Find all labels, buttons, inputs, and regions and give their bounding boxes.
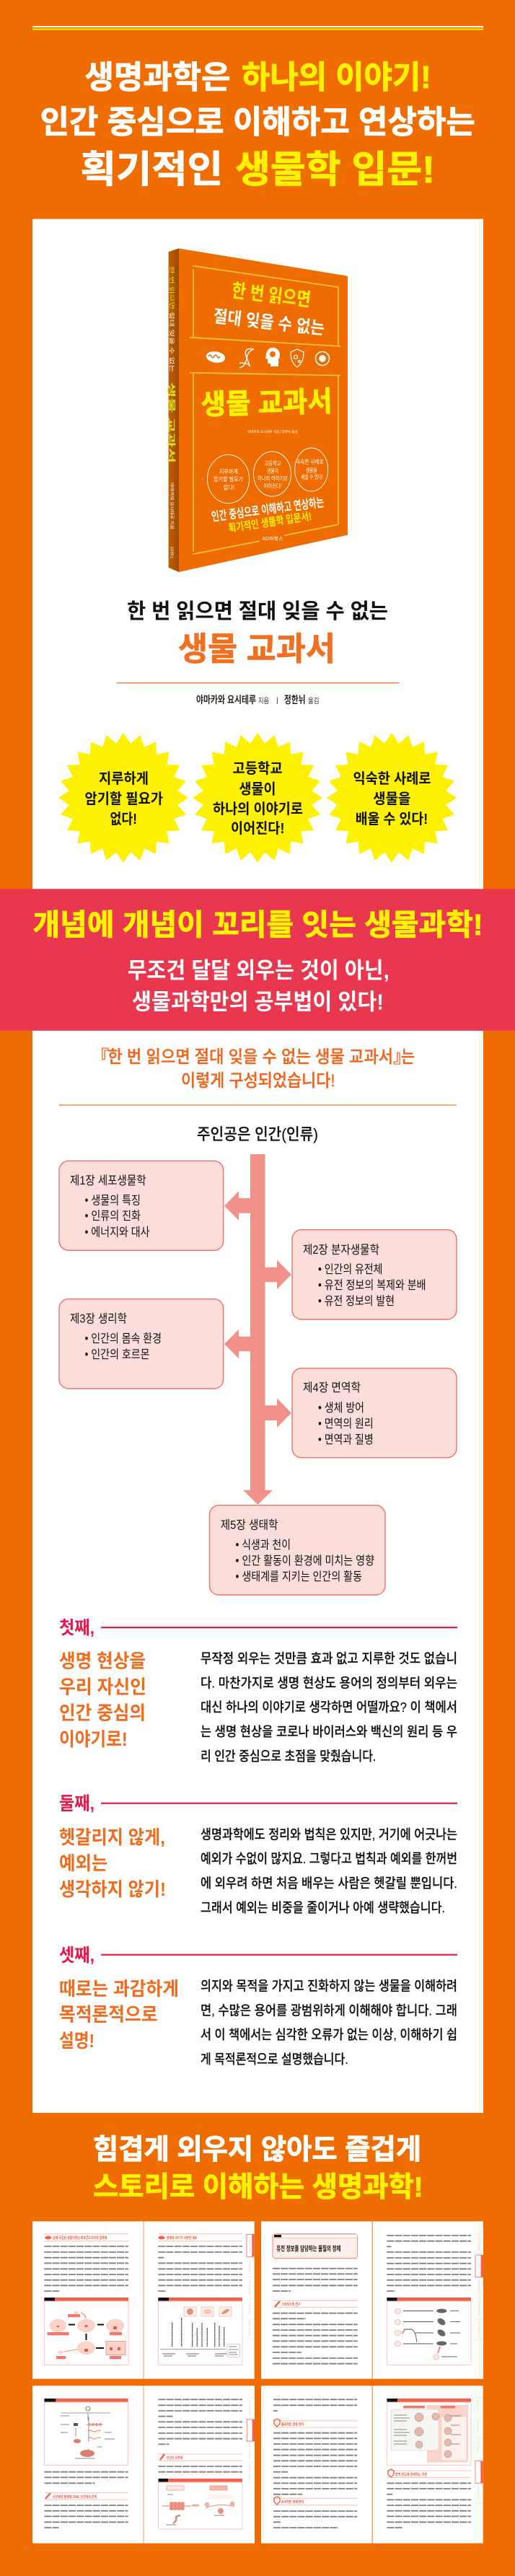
section: second: 둘째, bbox=[59, 1793, 94, 1814]
section: first: 다. 마찬가지로 생명 현상도 용어의 정의부터 외우는 bbox=[201, 1675, 457, 1690]
panel: chapter 5: • 생태계를 지키는 인간의 활동 bbox=[235, 1570, 362, 1583]
section: third: 설명! bbox=[59, 2030, 94, 2052]
red banner bbox=[0, 889, 515, 1031]
section: first: 는 생명 현상을 코로나 바이러스와 백신의 원리 등 우 bbox=[201, 1724, 457, 1739]
starburst 3: 익숙한 사례로 bbox=[353, 770, 431, 787]
panel: chapter 5: 제5장 생태학 bbox=[221, 1518, 278, 1532]
book cover: 야마카와 요시테루 지음 | 정한뉘 옮김 bbox=[247, 429, 298, 434]
arrow: central flow bbox=[243, 1154, 273, 1505]
panel: chapter 1: • 생물의 특징 bbox=[85, 1193, 141, 1208]
section: first: 대신 하나의 이야기로 생각하면 어떨까요? 이 책에서 bbox=[201, 1700, 457, 1715]
sub heading bbox=[273, 2497, 357, 2505]
section: first: 리 인간 중심으로 초점을 맞췄습니다. bbox=[201, 1749, 376, 1764]
section: second bbox=[59, 1793, 457, 1915]
author line: 정한뉘 bbox=[284, 694, 306, 705]
author line bbox=[196, 694, 320, 705]
starburst 1 bbox=[58, 733, 188, 863]
sub heading: 유전체와 염색체, DNA, 유전자의 관계 bbox=[53, 2494, 97, 2500]
starburst 2 bbox=[193, 733, 322, 863]
book cover: 인간 중심으로 이해하고 연상하는 bbox=[211, 496, 325, 524]
starburst 2: 이어진다! bbox=[231, 820, 284, 837]
page heading bbox=[44, 2234, 128, 2241]
starburst 2: 생물이 bbox=[239, 781, 276, 798]
section: third bbox=[59, 1946, 457, 2067]
composition heading: 』 bbox=[393, 1047, 410, 1067]
book cover: 없다! bbox=[224, 485, 234, 491]
book cover: 암기할 필요가 bbox=[214, 475, 244, 483]
chapter tabs bbox=[247, 2234, 255, 2339]
book spread 4 bbox=[261, 2386, 483, 2544]
figure: immune cells bbox=[387, 2399, 471, 2465]
cover badges bbox=[208, 448, 328, 504]
headline: 획기적인 bbox=[81, 149, 223, 191]
author line: 옮김 bbox=[308, 697, 320, 705]
book cover: 생물이 bbox=[267, 467, 278, 475]
figure: chromosome to dna bbox=[45, 2399, 128, 2465]
page heading: 형태와 크기가 다양한 세포 bbox=[167, 2235, 197, 2241]
book cover: 이어진다! bbox=[264, 482, 281, 489]
panel: chapter 5: • 인간 활동이 환경에 미치는 영향 bbox=[235, 1554, 374, 1568]
chapter title card bbox=[273, 2234, 358, 2259]
section: second: 생각하지 않기! bbox=[59, 1878, 166, 1900]
panel: chapter 2: • 유전 정보의 발현 bbox=[318, 1294, 395, 1308]
chapter tabs bbox=[475, 2234, 483, 2339]
headline: 하나의 이야기! bbox=[242, 60, 431, 95]
panel: chapter 4: • 생체 방어 bbox=[318, 1401, 364, 1415]
bottom headline bbox=[93, 2135, 423, 2203]
panel: chapter 1: • 인류의 진화 bbox=[85, 1209, 141, 1223]
chapter tabs bbox=[475, 2398, 483, 2503]
icon: head bbox=[265, 348, 280, 366]
chapter title card: 유전 정보를 담당하는 물질의 정체 bbox=[276, 2244, 340, 2252]
section: third: 셋째, bbox=[59, 1946, 94, 1966]
starburst 3: 생물을 bbox=[373, 791, 410, 807]
panel: chapter 2: • 유전 정보의 복제와 분배 bbox=[318, 1278, 426, 1292]
sub heading: 인간의 유전체 bbox=[167, 2455, 182, 2461]
starburst 2: 고등학교 bbox=[232, 760, 283, 777]
page heading bbox=[158, 2234, 242, 2241]
red banner: 생물과학만의 공부법이 있다! bbox=[132, 990, 384, 1014]
panel: chapter 4: • 면역과 질병 bbox=[318, 1433, 374, 1446]
icon: mitochondrion bbox=[206, 351, 225, 364]
panel: chapter 4 bbox=[292, 1368, 457, 1458]
section: third: 의지와 목적을 가지고 진화하지 않는 생물을 이해하려 bbox=[201, 1979, 457, 1994]
section: second: 생명과학에도 정리와 법칙은 있지만, 거기에 어긋나는 bbox=[201, 1827, 457, 1842]
composition heading bbox=[92, 1047, 415, 1091]
book title: 한 번 읽으면 절대 잊을 수 없는 bbox=[127, 599, 388, 623]
panel: chapter 2: • 인간의 유전체 bbox=[318, 1262, 382, 1276]
book cover: 지루하게 bbox=[219, 467, 238, 475]
icon: dna bbox=[239, 349, 254, 368]
book cover: 고등학교 bbox=[264, 460, 281, 467]
book cover: 배울 수 있다! bbox=[301, 473, 323, 480]
figure: griffith experiment bbox=[387, 2298, 471, 2365]
bottom headline: 스토리로 이해하는 생명과학! bbox=[93, 2172, 423, 2203]
book cover bbox=[167, 248, 348, 572]
panel: chapter 3: 제3장 생리학 bbox=[70, 1311, 127, 1326]
composition heading: 『 bbox=[92, 1047, 109, 1067]
section: first: 첫째, bbox=[59, 1618, 94, 1638]
section: third: 서 이 책에서는 심각한 오류가 없는 이상, 이해하기 쉽 bbox=[201, 2027, 457, 2042]
bottom headline: 힘겹게 외우지 않아도 즐겁게 bbox=[93, 2135, 421, 2166]
panel: chapter 3: • 인간의 몸속 환경 bbox=[85, 1332, 162, 1345]
starburst 2: 하나의 이야기로 bbox=[213, 801, 303, 817]
starburst 3 bbox=[327, 733, 457, 863]
section: second: 예외가 수없이 많지요. 그렇다고 법칙과 예외를 한꺼번 bbox=[201, 1851, 457, 1866]
chapter tabs bbox=[247, 2398, 255, 2483]
sub heading bbox=[159, 2454, 242, 2461]
panel: chapter 3: • 인간의 호르몬 bbox=[85, 1348, 150, 1361]
book cover: 절대 잊을 수 없는 bbox=[212, 307, 325, 339]
headline bbox=[40, 60, 475, 191]
book cover: AD마북스 bbox=[262, 535, 283, 542]
red banner: 무조건 달달 외우는 것이 아닌, bbox=[128, 958, 389, 983]
book spread 2 bbox=[261, 2221, 483, 2379]
book cover: 익숙한 사례로 bbox=[296, 458, 324, 465]
starburst 1: 없다! bbox=[110, 811, 137, 827]
book cover: 절대 잊을 수 없는 bbox=[169, 312, 175, 373]
book cover: 생물 교과서 bbox=[201, 387, 333, 421]
section: third: 면, 수많은 용어를 광범위하게 이해해야 합니다. 그래 bbox=[201, 2003, 457, 2018]
icon: globe bbox=[316, 352, 329, 365]
book cover: 획기적인 생물학 입문서! bbox=[228, 511, 312, 535]
diagram title: 주인공은 인간(인류) bbox=[197, 1125, 318, 1143]
section: first: 우리 자신인 bbox=[59, 1676, 146, 1698]
sub heading bbox=[273, 2419, 357, 2427]
starburst 1: 지루하게 bbox=[99, 770, 149, 787]
headline: 인간 중심으로 이해하고 연상하는 bbox=[40, 105, 475, 140]
composition heading: 이렇게 구성되었습니다! bbox=[181, 1071, 335, 1091]
section: second: 그래서 예외는 비중을 줄이거나 아예 생략했습니다. bbox=[201, 1900, 445, 1915]
page heading: 원래 독립된 생물이었던 미토콘드리아와 엽록체 bbox=[53, 2235, 107, 2241]
book spread 1 bbox=[32, 2221, 255, 2379]
figure: endosymbiosis bbox=[44, 2298, 128, 2365]
section: first: 무작정 외우는 것만큼 효과 없고 지루한 것도 없습니 bbox=[201, 1651, 457, 1666]
sub heading bbox=[45, 2493, 128, 2500]
book cover: 하나의 이야기로 bbox=[258, 475, 288, 482]
arrow: to chapter 3 bbox=[224, 1329, 250, 1358]
panel: chapter 3 bbox=[59, 1299, 224, 1389]
red banner: 개념에 개념이 꼬리를 잇는 생물과학! bbox=[33, 908, 483, 941]
arrow: to chapter 1 bbox=[224, 1191, 250, 1221]
composition heading: 는 bbox=[401, 1047, 415, 1067]
section: first: 인간 중심의 bbox=[59, 1702, 146, 1724]
sub heading: 화학적인 생체 방어 bbox=[281, 2499, 304, 2505]
panel: chapter 1: 제1장 세포생물학 bbox=[70, 1174, 146, 1187]
arrow: to chapter 2 bbox=[265, 1260, 291, 1289]
author line: 야마카와 요시테루 bbox=[196, 694, 256, 705]
author line: | bbox=[276, 697, 278, 705]
figure: cell sizes bbox=[158, 2298, 242, 2365]
section: second: 에 외우려 하면 처음 배우는 사람은 헷갈릴 뿐입니다. bbox=[201, 1876, 457, 1891]
section: third: 게 목적론적으로 설명했습니다. bbox=[201, 2052, 348, 2067]
section: first: 생명 현상을 bbox=[59, 1650, 146, 1672]
section: third: 목적론적으로 bbox=[59, 2004, 158, 2026]
section: first bbox=[59, 1618, 457, 1764]
icon: shield bbox=[291, 349, 304, 367]
sub heading: 면역 반응에 관여하는 기관 bbox=[395, 2471, 427, 2477]
sub heading: 물리적인 생체 방어 bbox=[281, 2421, 304, 2427]
sub heading bbox=[387, 2469, 471, 2477]
panel: chapter 2 bbox=[292, 1230, 457, 1319]
book cover: AD마북스 bbox=[169, 547, 175, 558]
section: second: 예외는 bbox=[59, 1852, 107, 1874]
panel: chapter 1: • 에너지와 대사 bbox=[85, 1225, 150, 1239]
starburst 3: 배울 수 있다! bbox=[356, 811, 428, 827]
sub heading: 그리피스의 연구 bbox=[281, 2301, 301, 2307]
book cover: 생물 교과서 bbox=[167, 382, 177, 463]
starburst 1: 암기할 필요가 bbox=[85, 791, 163, 807]
panel: chapter 5 bbox=[209, 1505, 385, 1595]
book cover: 야마카와 요시테루 지음 bbox=[169, 483, 175, 529]
book cover: 한 번 읽으면 bbox=[169, 266, 175, 309]
section: first: 이야기로! bbox=[59, 1728, 128, 1750]
sub heading bbox=[273, 2300, 358, 2307]
book cover: 한 번 읽으면 bbox=[231, 279, 312, 311]
book spread 3 bbox=[32, 2386, 255, 2544]
book title bbox=[127, 599, 388, 667]
panel: chapter 2: 제2장 분자생물학 bbox=[303, 1243, 379, 1257]
panel: chapter 4: • 면역의 원리 bbox=[318, 1417, 374, 1430]
arrow: to chapter 4 bbox=[265, 1398, 291, 1428]
section: third: 때로는 과감하게 bbox=[59, 1978, 179, 2000]
headline: 생명과학은 bbox=[85, 60, 231, 95]
headline: 생물학 입문! bbox=[235, 149, 435, 191]
panel: chapter 4: 제4장 면역학 bbox=[303, 1381, 361, 1394]
panel: chapter 1 bbox=[59, 1161, 224, 1250]
author line: 지음 bbox=[258, 697, 269, 705]
book title: 생물 교과서 bbox=[178, 630, 335, 667]
section: second: 헷갈리지 않게, bbox=[59, 1827, 165, 1848]
book cover: 생물을 bbox=[306, 466, 317, 473]
panel: chapter 5: • 식생과 천이 bbox=[235, 1538, 291, 1552]
figure: gene expression bbox=[159, 2479, 242, 2529]
composition heading: 한 번 읽으면 절대 잊을 수 없는 생물 교과서 bbox=[107, 1047, 393, 1067]
